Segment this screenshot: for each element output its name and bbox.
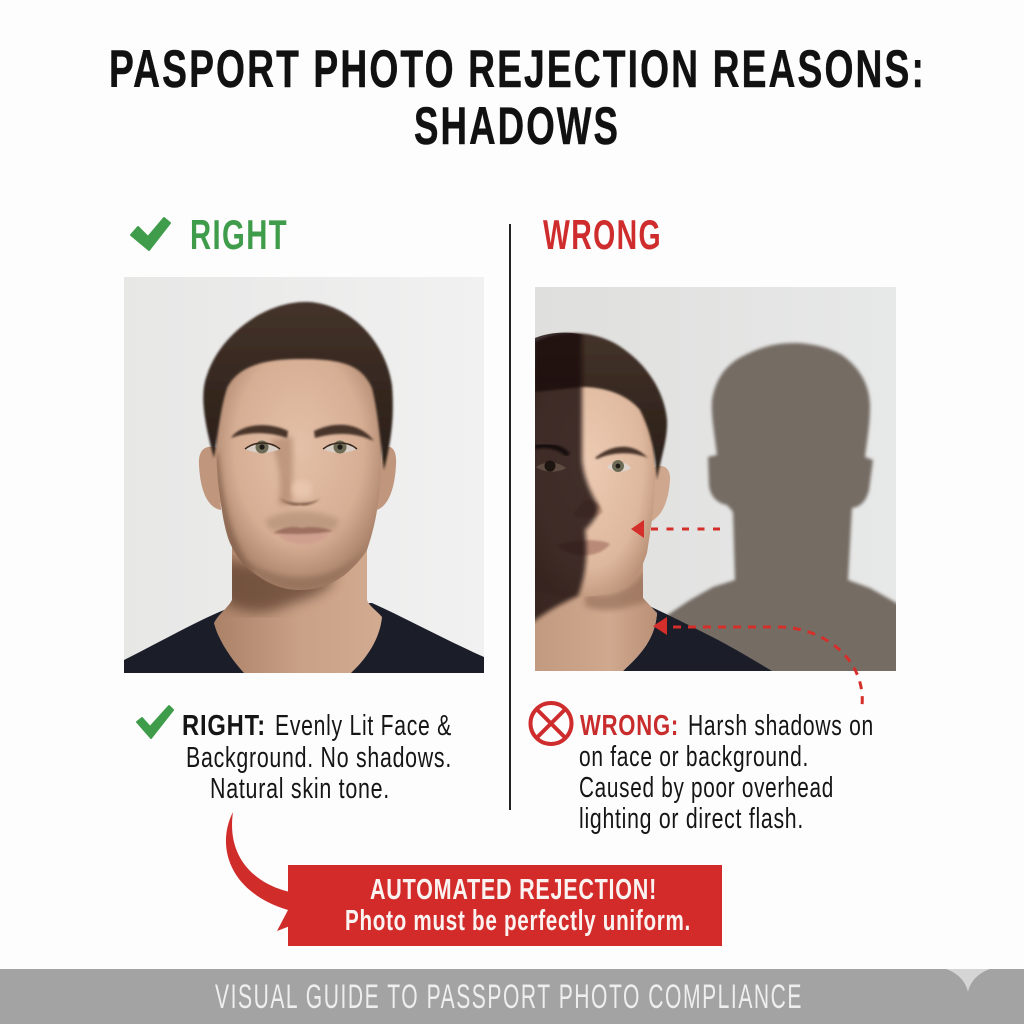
shadow over left half of face — [535, 332, 602, 624]
caption: wrong: lighting or direct flash. — [579, 803, 804, 835]
icon: red crossed circle — [530, 703, 572, 744]
caption: right: Background. No shadows. — [186, 742, 452, 774]
caption: right: Evenly Lit Face & — [275, 710, 452, 742]
ears — [199, 447, 396, 510]
shadowed eye and brow — [535, 446, 568, 472]
footer bar — [0, 969, 1024, 1024]
nose — [279, 480, 321, 506]
neck — [214, 548, 382, 673]
face — [535, 365, 655, 597]
face — [216, 345, 382, 590]
icon: green check — [137, 706, 173, 738]
heading: right — [131, 211, 288, 258]
caption: right: RIGHT: — [182, 710, 266, 742]
lips — [273, 527, 333, 545]
caption: right — [137, 706, 452, 805]
lit nose and lips — [557, 500, 610, 555]
caption: wrong: Caused by poor overhead — [579, 772, 834, 804]
shirt — [623, 604, 772, 671]
brows — [231, 425, 374, 441]
photo: evenly lit face — [124, 277, 484, 680]
callout banner with curved arrow — [226, 812, 722, 946]
caption: wrong: on face or background. — [579, 741, 809, 773]
right eye — [607, 460, 631, 472]
callout banner with curved arrow: Photo must be perfectly uniform. — [345, 905, 691, 937]
center divider — [509, 224, 511, 810]
callout banner with curved arrow: AUTOMATED REJECTION! — [370, 874, 657, 906]
caption: wrong — [530, 703, 874, 835]
hair — [535, 333, 667, 480]
title: SHADOWS — [414, 97, 620, 156]
caption: right: Natural skin tone. — [210, 773, 390, 805]
icon: green check — [131, 218, 170, 250]
right brow — [595, 447, 648, 459]
footer notch — [946, 969, 990, 992]
photo: harsh shadows — [525, 287, 900, 675]
hair — [203, 302, 393, 470]
eyes — [245, 440, 357, 454]
banner — [288, 865, 722, 946]
heading: wrong: WRONG — [543, 211, 662, 258]
facial shading — [214, 436, 366, 590]
neck — [535, 564, 657, 671]
annotation arrow: dashed curve — [673, 627, 862, 706]
ear — [650, 466, 670, 522]
shirt — [124, 603, 484, 673]
caption: wrong: WRONG: — [580, 710, 679, 742]
heading: right: RIGHT — [190, 211, 288, 258]
annotation arrow: face — [631, 520, 720, 538]
caption: wrong: Harsh shadows on — [688, 710, 874, 742]
annotation arrow: shoulder head — [653, 617, 667, 635]
curved arrow tail — [226, 812, 290, 931]
title — [109, 40, 926, 156]
background shadow silhouette — [666, 340, 896, 671]
